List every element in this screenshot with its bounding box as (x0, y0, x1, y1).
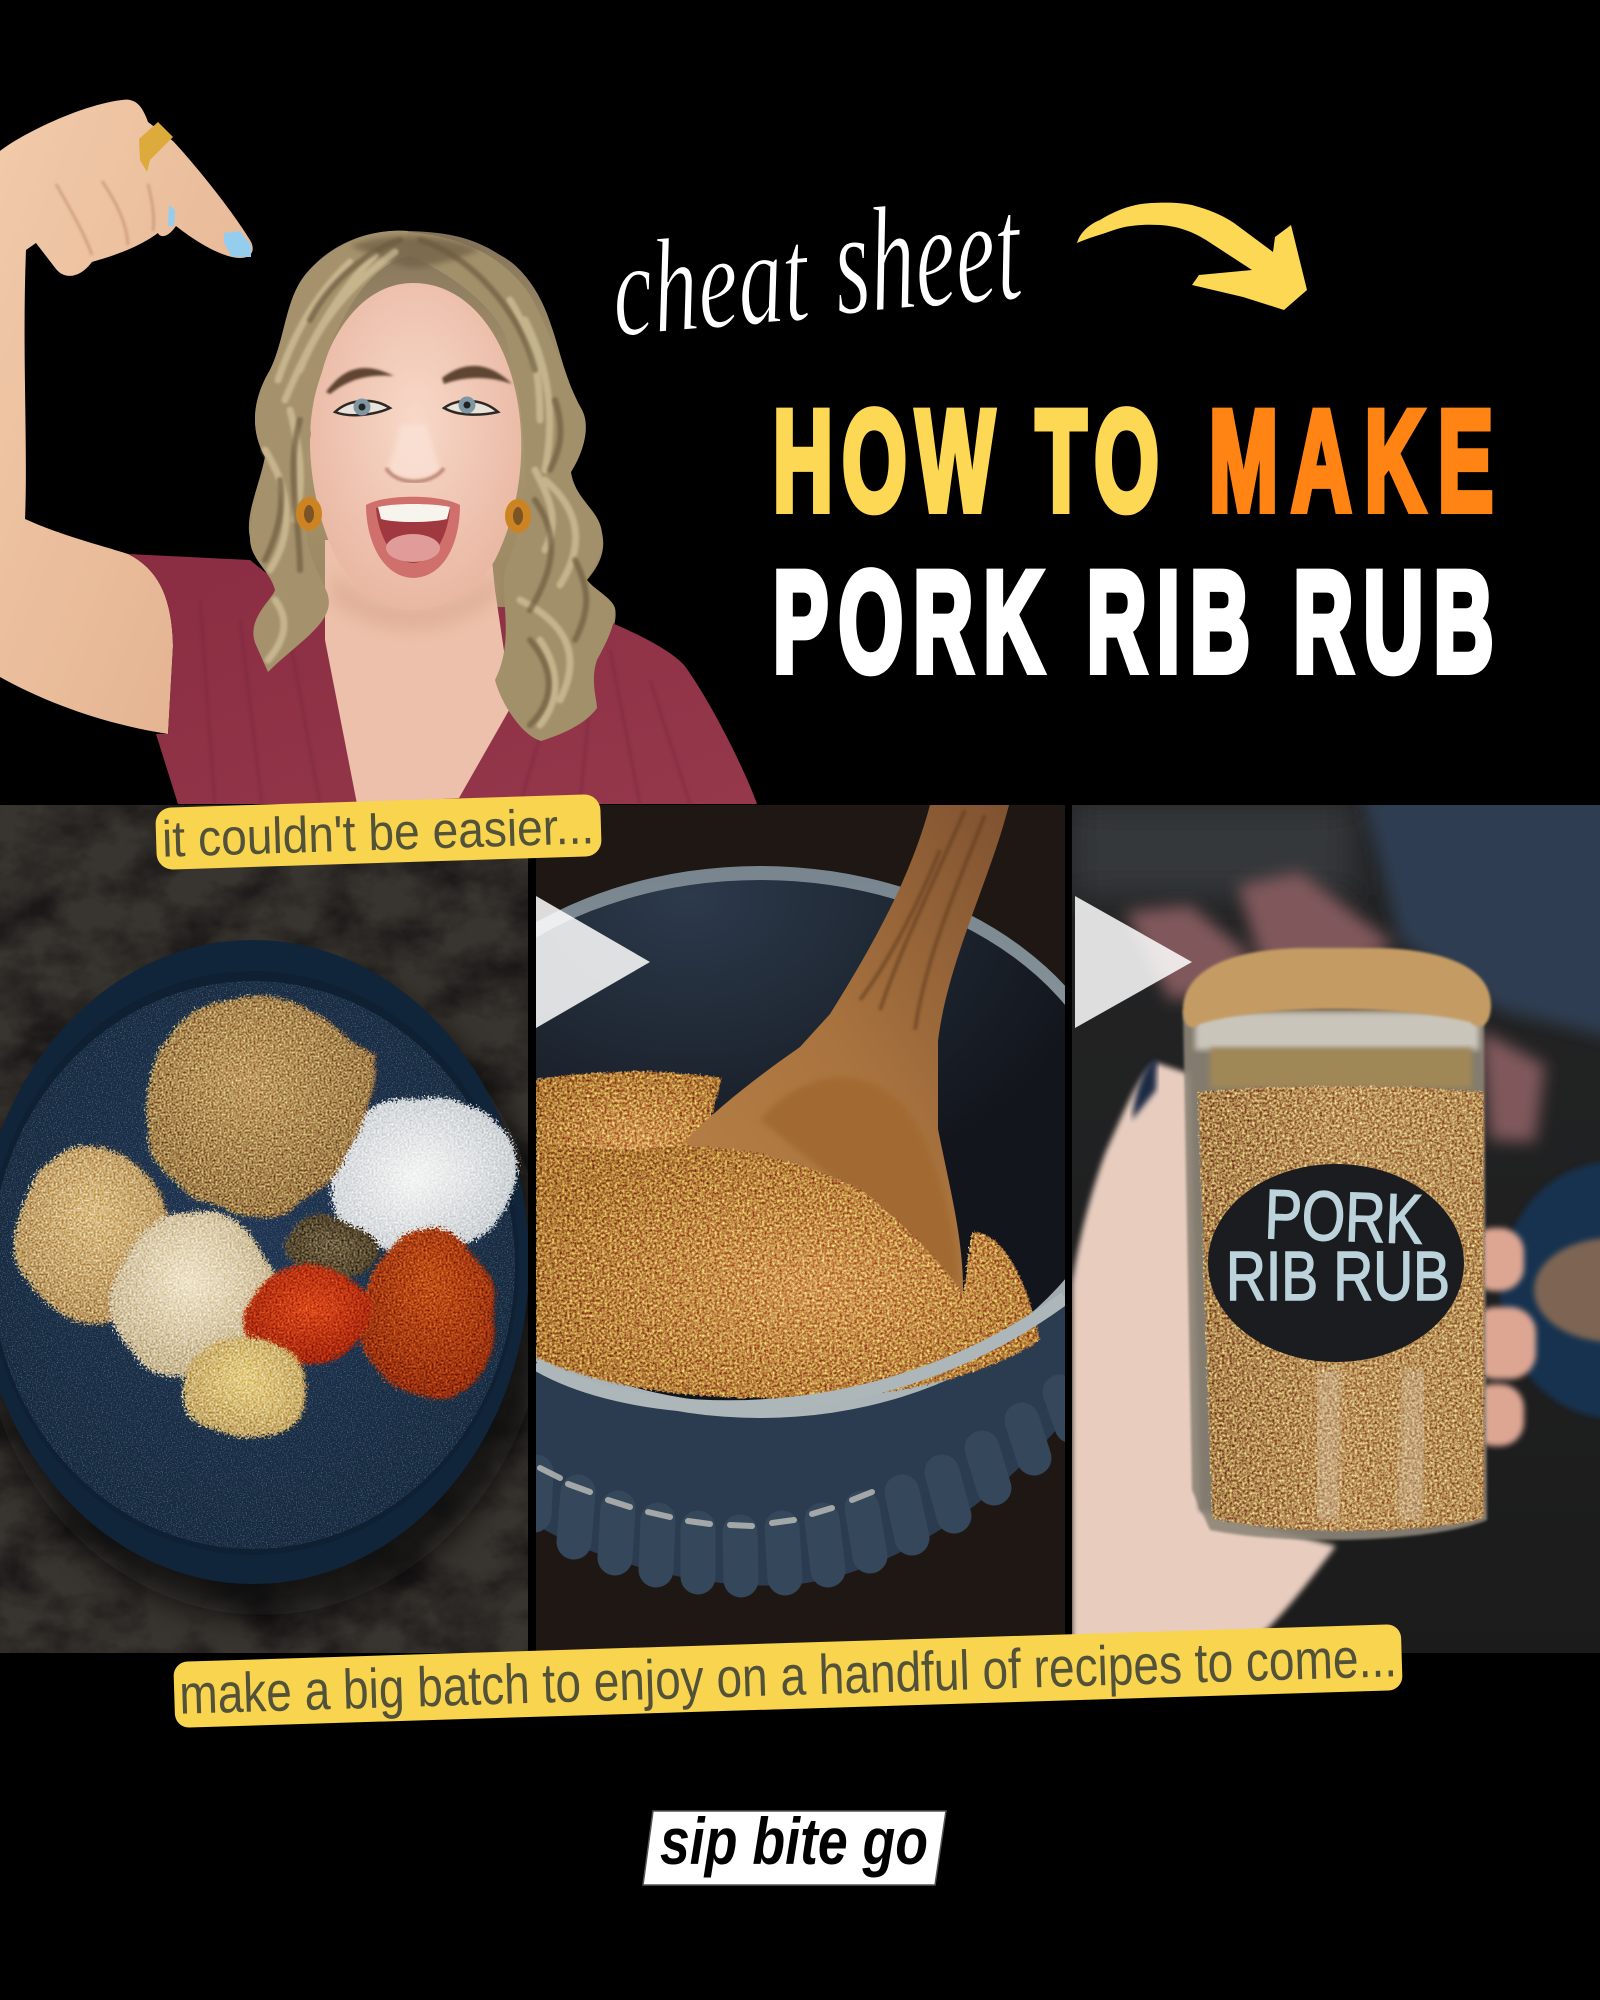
spoon wood grain (860, 810, 985, 1030)
photo panel: mixed rub in blue bowl with wooden spoon (536, 805, 1065, 1651)
white salt pile (331, 1095, 519, 1255)
hair highlight strands (265, 252, 576, 725)
gold signet ring (139, 122, 173, 172)
paprika pile (242, 1264, 370, 1368)
word: sheet: sheet (826, 165, 1029, 347)
rub behind spoon (536, 1070, 722, 1151)
plate centre (0, 981, 515, 1549)
hair front right (408, 232, 615, 741)
plate groove (0, 971, 519, 1555)
make: MAKE (1209, 380, 1507, 541)
mug (1500, 1162, 1600, 1418)
right eyebrow (442, 366, 512, 384)
word: cheat: cheat (606, 200, 816, 366)
neck shadow (330, 570, 495, 630)
nose highlight (388, 425, 440, 479)
cheat sheet script heading (606, 165, 1029, 366)
red blouse (128, 554, 757, 804)
spice rub mound (536, 1145, 1040, 1398)
photo panel: hand holding labelled jar (1072, 790, 1600, 1653)
spoon bowl (760, 1077, 958, 1285)
hair front left (250, 231, 410, 672)
painted fingernail (1132, 1058, 1157, 1120)
second blue nail (168, 205, 175, 226)
blue shirt backdrop (1361, 790, 1600, 1040)
chalkboard label (1208, 1164, 1464, 1362)
dark wood table (536, 805, 1065, 1653)
bamboo lid (1183, 948, 1491, 1027)
blurred background (1072, 805, 1600, 1653)
open mouth (366, 497, 460, 578)
ground pepper pile (290, 1214, 374, 1276)
front rim edge over rub (536, 1298, 1065, 1407)
how to: HOW TO (773, 380, 1168, 541)
tan garlic powder pile (16, 1145, 168, 1321)
title line 1 (773, 380, 1507, 541)
glass jar body (1183, 1010, 1487, 1540)
hair back (249, 231, 616, 741)
fingers behind jar (1470, 1228, 1536, 1446)
brown sugar scoop (142, 996, 376, 1214)
bowl interior (536, 880, 1065, 1400)
blouse crinkles (200, 600, 690, 804)
hand (1072, 1063, 1336, 1640)
finger creases (56, 181, 154, 255)
bowl exterior (536, 1290, 1065, 1586)
label text: rib rub: RIB RUB (1226, 1237, 1450, 1315)
jar inner lid band (1210, 1048, 1472, 1088)
curved yellow arrow (1077, 203, 1307, 310)
nostril shadow (386, 468, 444, 482)
cayenne pile (360, 1228, 496, 1392)
jar highlight streaks (1326, 1370, 1415, 1520)
grey backdrop (1072, 805, 1352, 895)
jar upper glass band (1195, 1012, 1479, 1050)
right eye (444, 396, 498, 415)
neck and chest (325, 540, 512, 804)
logo: sip bite go: sip bite go (660, 1804, 928, 1878)
title line 2: PORK RIB RUB (773, 541, 1504, 702)
left eye (335, 398, 390, 416)
blurred pink ribs (1125, 872, 1545, 1142)
bowl ridge highlights (540, 1468, 872, 1526)
plate shadow (0, 965, 547, 1615)
ground mustard pile (185, 1338, 305, 1442)
blue fingernail (224, 231, 251, 257)
dark marble surface (0, 805, 528, 1653)
left eyebrow (326, 368, 394, 394)
mug contents (1534, 1238, 1600, 1342)
play arrow between steps (536, 896, 650, 1028)
arm and pointing hand (0, 100, 253, 734)
label text: pork: PORK (1263, 1175, 1424, 1259)
bowl fluted ridges (534, 1392, 1072, 1580)
presenter pointing down (0, 100, 757, 804)
hair dark strands (265, 240, 586, 725)
photo panel: spice ingredients on blue plate (0, 805, 547, 1653)
right amber earring (509, 503, 527, 529)
left amber earring (300, 501, 318, 527)
callout: it couldn't be easier: it couldn't be easier... (161, 797, 595, 868)
spice rub in jar (1198, 1086, 1484, 1531)
wooden spoon (684, 805, 1009, 1296)
play arrow between steps (1075, 896, 1192, 1028)
face (310, 283, 521, 610)
plate rim (0, 940, 529, 1584)
dark hair part (350, 236, 480, 268)
bowl rim (536, 866, 1065, 1418)
cream onion powder pile (116, 1208, 276, 1384)
